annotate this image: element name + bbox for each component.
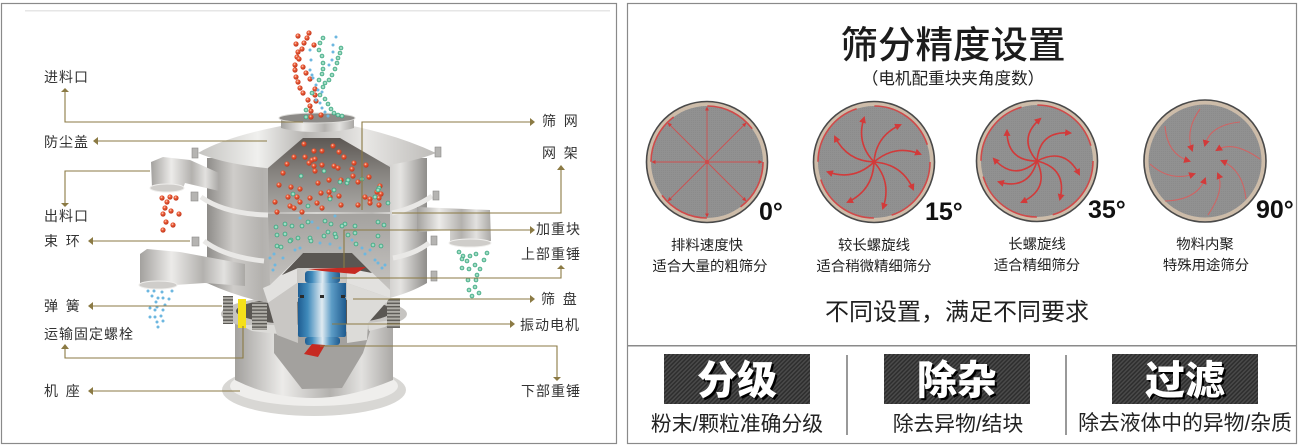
captions under discs: 适合大量的粗筛分 [652,258,768,275]
captions under discs [652,236,1249,275]
badge: grading [651,354,823,436]
labels: left side: 出料口 [44,208,89,224]
angle labels: 35° [1088,196,1126,224]
title: 筛分精度设置 [840,24,1066,66]
disc: 35 degrees [976,100,1098,222]
lower weight (red) [304,344,325,357]
captions under discs: 特殊用途筛分 [1163,257,1249,274]
badge: impurity removal [884,354,1030,436]
angle labels: 90° [1256,196,1294,224]
particles: green [274,36,489,298]
labels: left side: 弹 簧 [44,298,80,314]
disc: 0 degrees [646,102,768,222]
labels: left side: 运输固定螺栓 [44,326,134,342]
dust cover [198,126,436,171]
labels: right side: 加重块 [536,221,581,237]
disc: 15 degrees [814,102,934,222]
leader lines and arrows [61,88,565,395]
labels: right side: 网 架 [542,145,578,161]
badge: grading: 分级 [697,359,777,403]
springs [223,296,400,330]
motor housing sleeves [268,283,390,343]
badge: filtration: 除去液体中的异物/杂质 [1078,412,1292,435]
captions under discs: 较长螺旋线 [838,236,910,254]
flanges [201,196,432,261]
badge: impurity removal: 除杂 [917,358,997,403]
badge: grading: 粉末/颗粒准确分级 [651,413,823,436]
labels: left side: 机 座 [44,383,80,399]
labels: right side: 筛 盘 [541,291,577,307]
labels: left side: 进料口 [44,69,89,85]
captions under discs: 排料速度快 [671,237,743,254]
badge: impurity removal: 除去异物/结块 [893,413,1023,436]
labels: left side: 防尘盖 [44,134,89,150]
body shell [207,158,427,303]
labels: left side [44,69,134,399]
upper chamber cutaway [268,138,390,212]
angle labels [759,196,1294,226]
panel: sieve precision settings [627,4,1297,444]
upper weight (red) [308,267,366,274]
panel: machine structure diagram [2,4,616,444]
disc: 90 degrees [1144,100,1266,222]
machine base [221,295,407,416]
sieve machine illustration [139,30,491,416]
cone under sieve [263,253,390,303]
angle labels: 15° [925,198,963,226]
labels: right side: 筛 网 [542,113,578,129]
lower outlet left [139,249,245,289]
particles: red in chamber and falling [159,30,384,233]
captions under discs: 物料内聚 [1176,236,1234,253]
upper outlet left [150,157,219,192]
particles: blue fines [146,36,386,328]
angle labels: 0° [759,198,783,226]
lower chamber cutaway [268,214,390,290]
captions under discs: 适合精细筛分 [994,257,1080,274]
labels: right side: 上部重锤 [521,246,581,262]
labels: left side: 束 环 [44,233,80,249]
labels: right side: 振动电机 [520,317,580,333]
captions under discs: 适合稍微精细筛分 [816,258,932,275]
badge: filtration: 过滤 [1145,359,1225,403]
subtitle: （电机配重块夹角度数） [862,69,1044,88]
labels: right side: 下部重锤 [521,383,581,399]
transport fixing bolt (yellow) [238,299,246,328]
vibration motor [298,271,346,345]
upper outlet right [417,207,491,247]
feed inlet collar [279,113,355,132]
clamps [191,147,441,281]
badge: filtration [1078,354,1292,435]
labels: right side [520,113,581,399]
captions under discs: 长螺旋线 [1008,236,1066,253]
statement line: 不同设置，满足不同要求 [825,299,1089,326]
